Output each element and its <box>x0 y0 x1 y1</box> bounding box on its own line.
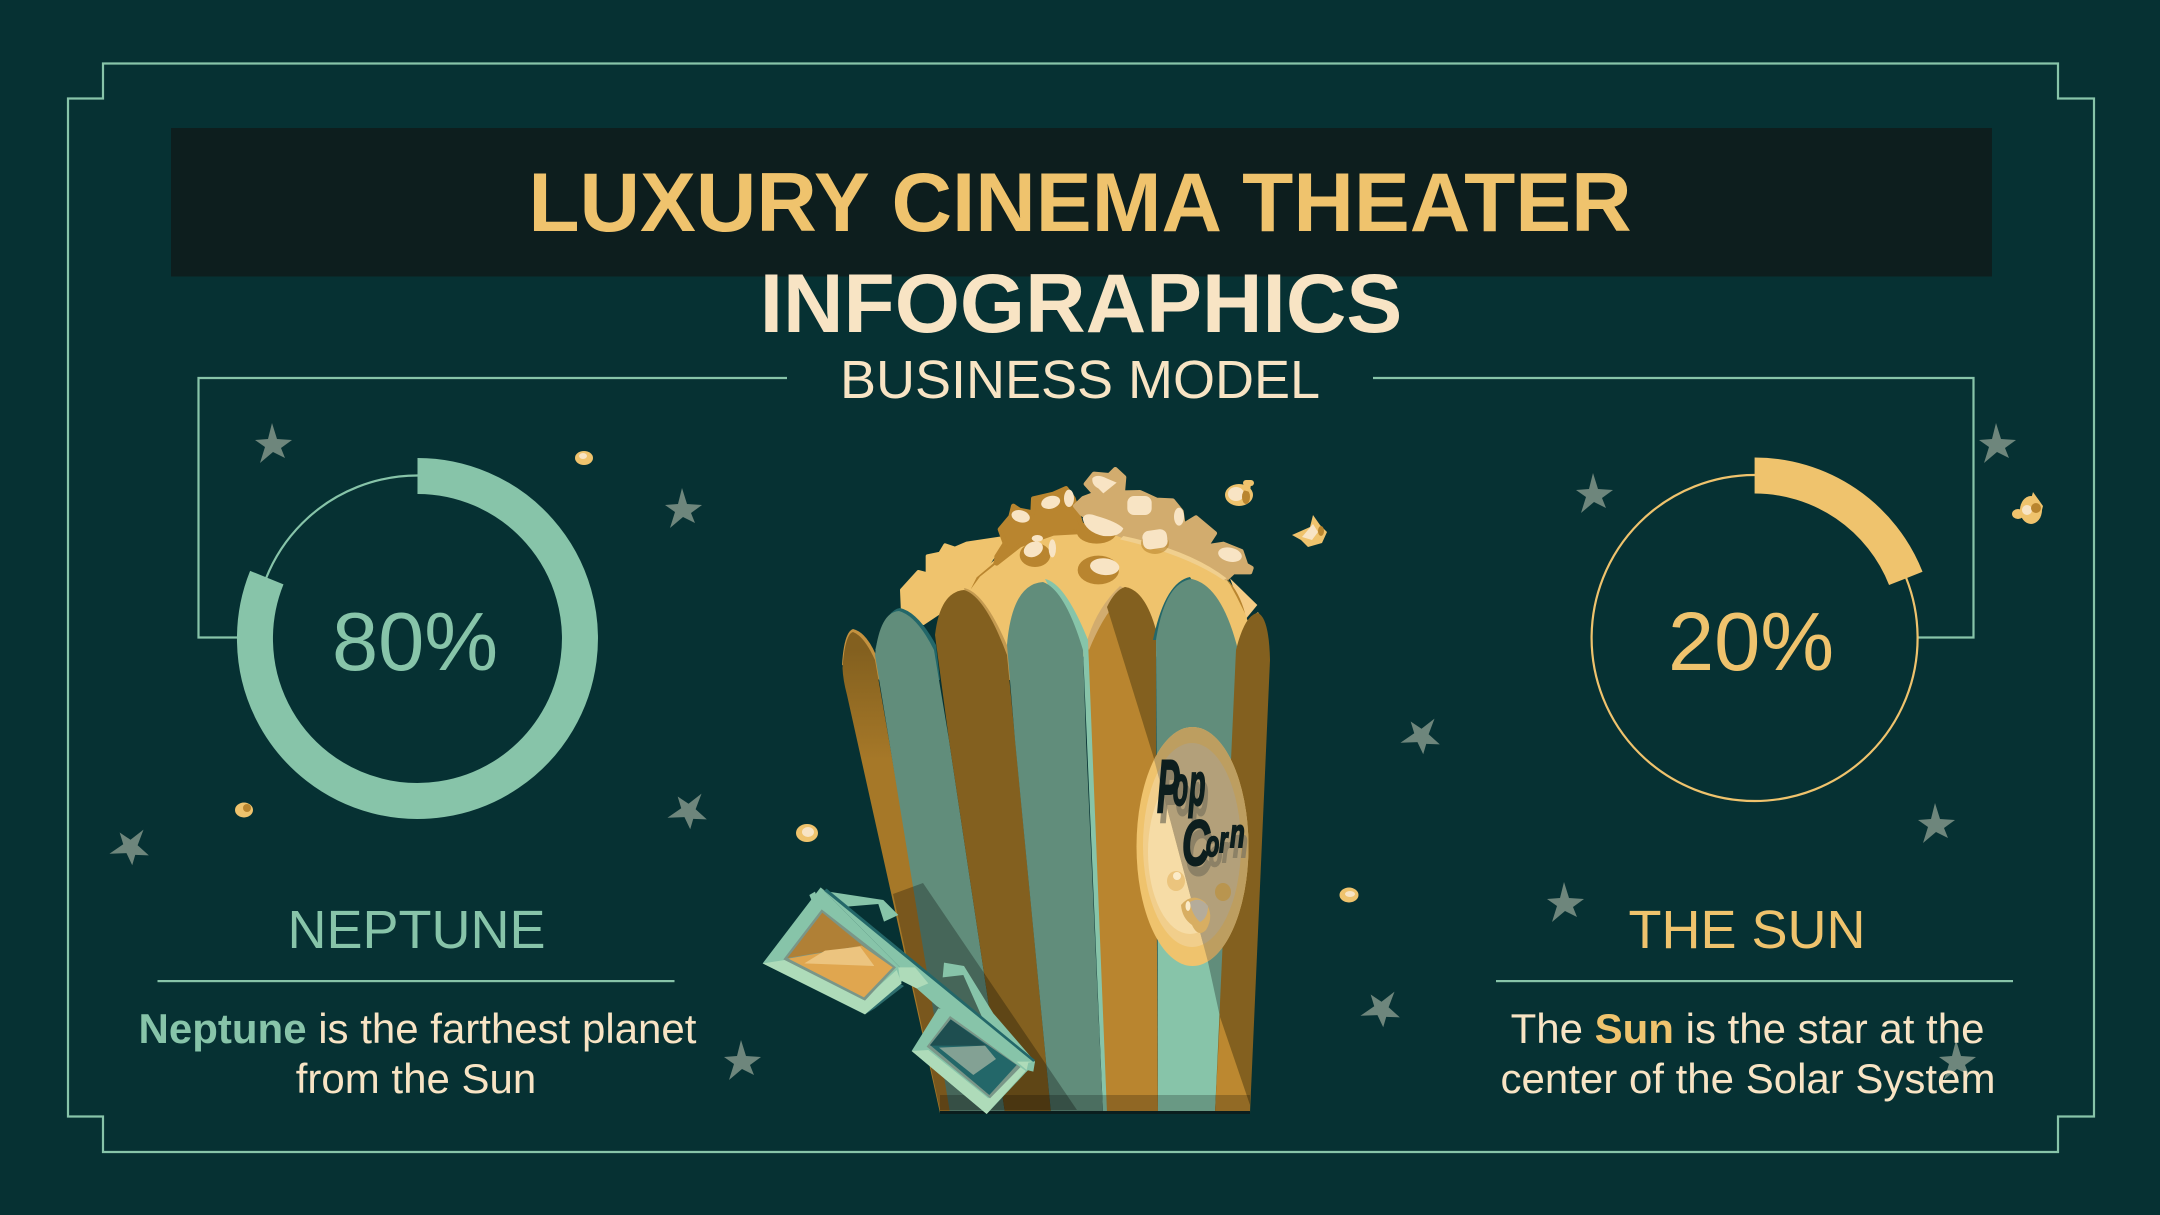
divider: The Sun <box>1496 980 2013 982</box>
popcorn label lettering: o <box>1173 756 1188 818</box>
background stars <box>106 423 2016 1080</box>
kernel mid left <box>796 824 818 842</box>
heading: Neptune: NEPTUNE <box>287 900 546 960</box>
text block: Neptune description: Neptune is the farthest planet <box>139 1005 696 1052</box>
top bar and bridge <box>809 887 1035 1072</box>
stripe 5 <box>1086 586 1158 1113</box>
text block: The Sun description: center of the Solar System <box>1501 1055 1995 1102</box>
donut chart: The Sun 20%: 20% <box>1668 595 1834 688</box>
popcorn label lettering: p <box>1191 761 1208 828</box>
popcorn label lettering: P <box>1160 755 1183 839</box>
popcorn label lettering <box>1157 745 1248 890</box>
stripe 3 <box>935 588 1051 1113</box>
kernel top 1 <box>1225 480 1254 506</box>
donut chart: The Sun 20% <box>1592 475 1918 801</box>
right lens frame <box>912 1008 1035 1114</box>
divider: Neptune <box>158 980 674 982</box>
bucket base line <box>940 1111 1250 1114</box>
stripe 7 <box>1215 612 1270 1113</box>
title line 1: LUXURY CINEMA THEATER <box>528 155 1632 249</box>
glasses shadow on bucket <box>893 883 1077 1110</box>
popcorn bucket <box>842 577 1270 1114</box>
connector line left <box>198 378 787 638</box>
popcorn label lettering: r <box>1222 830 1232 870</box>
stripe 1 <box>842 629 953 1113</box>
left lens frame <box>763 887 904 1014</box>
stripe 4 <box>1007 579 1107 1113</box>
popcorn label lettering: C <box>1182 808 1210 880</box>
popcorn label lettering: n <box>1233 821 1248 865</box>
popcorn label lettering: C <box>1185 818 1213 890</box>
heading: The Sun: THE SUN <box>1628 900 1866 960</box>
3D glasses <box>763 887 1035 1114</box>
kernel top 2 <box>1292 515 1327 547</box>
kernel mid right <box>1340 888 1358 902</box>
popcorn heap <box>902 469 1257 657</box>
popcorn label <box>1136 727 1248 966</box>
donut chart: Neptune 80% <box>254 476 580 802</box>
popcorn label lettering: o <box>1206 824 1219 864</box>
text block: Neptune description: from the Sun <box>296 1055 536 1102</box>
flying popcorn kernels <box>235 451 2043 902</box>
stripe 6 <box>1153 577 1238 1113</box>
stripe 2 <box>875 608 1005 1113</box>
popcorn label lettering: p <box>1188 751 1205 818</box>
kernel upper left <box>575 451 593 465</box>
kernel right <box>2012 492 2043 524</box>
title band <box>171 128 1992 276</box>
popcorn label lettering: P <box>1157 745 1180 829</box>
popcorn label lettering: n <box>1230 811 1245 855</box>
connector line right <box>1373 378 1974 638</box>
popcorn label lettering: o <box>1209 834 1222 874</box>
popcorn label lettering: o <box>1176 766 1191 828</box>
bucket base band <box>940 1095 1250 1112</box>
subtitle: BUSINESS MODEL <box>840 350 1320 410</box>
kernel lower left <box>235 802 253 818</box>
title line 2: INFOGRAPHICS <box>760 256 1402 350</box>
donut chart: Neptune 80%: 80% <box>332 595 498 688</box>
text block: The Sun description: The Sun is the star at the <box>1511 1005 1984 1052</box>
popcorn label lettering: r <box>1219 820 1229 860</box>
temple arms <box>828 892 1035 1062</box>
